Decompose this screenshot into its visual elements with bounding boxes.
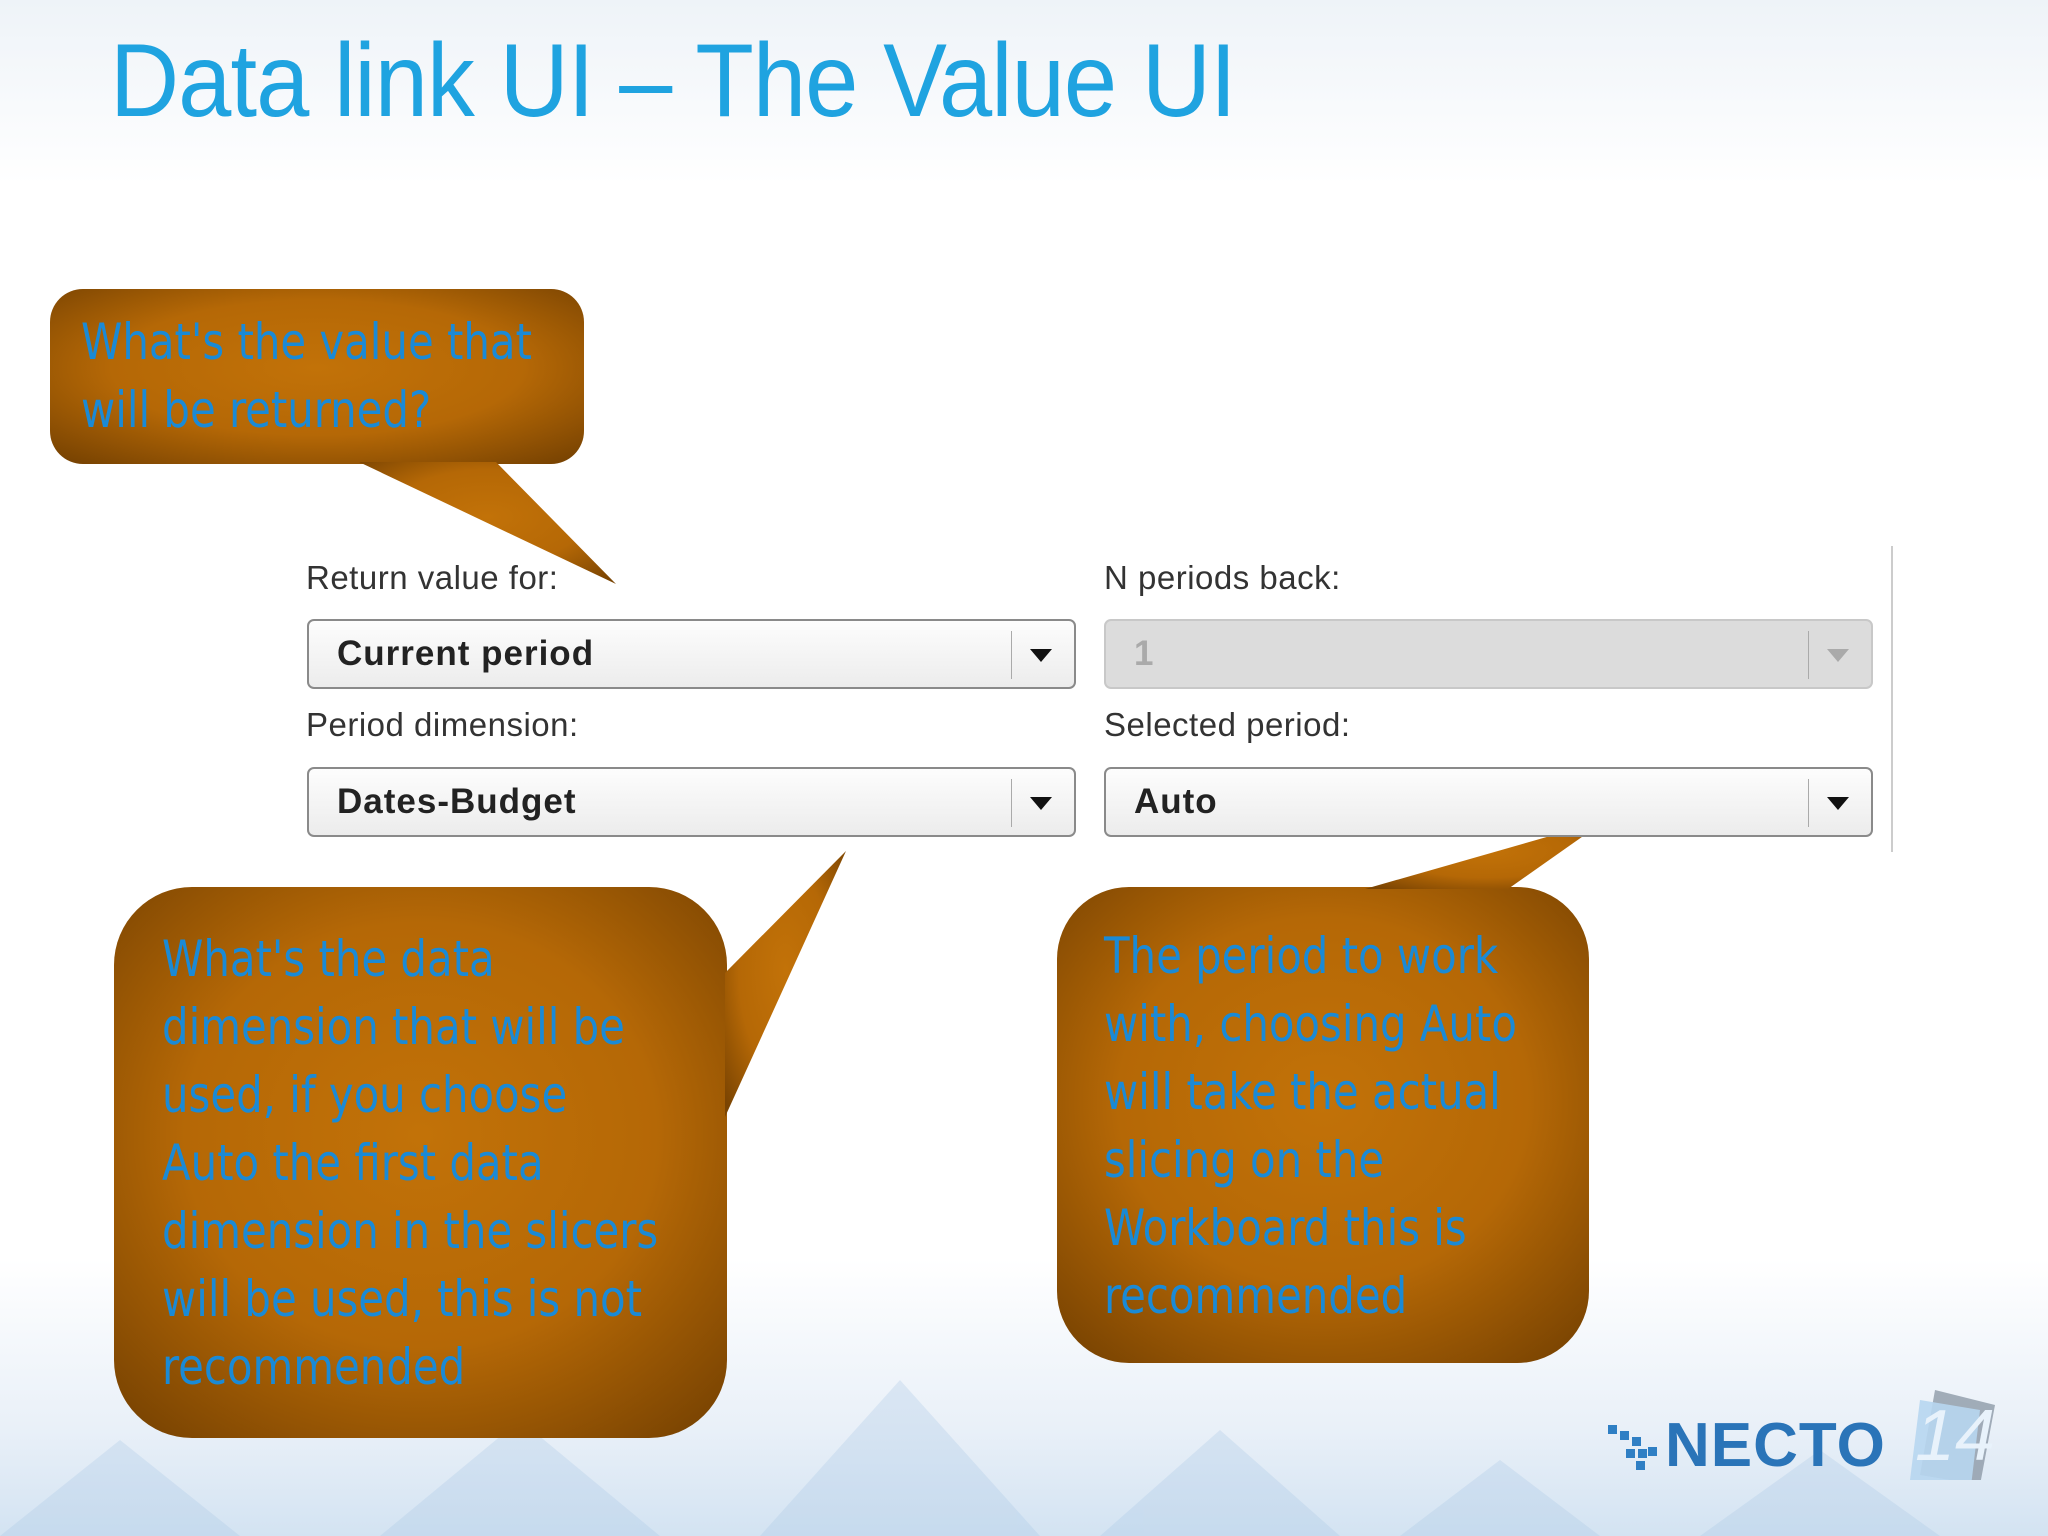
callout 3 text: will take the actual: [1104, 1063, 1501, 1121]
callout 2 text: will be used, this is not: [162, 1270, 642, 1328]
form: dates-budget dropdown: Dates-Budget: [337, 782, 577, 821]
form: selected period label: Selected period:: [1104, 706, 1350, 743]
callout 3 text: Workboard this is: [1104, 1199, 1467, 1257]
callout 1 shape: [50, 289, 616, 584]
form: current period dropdown: Current period: [337, 634, 594, 673]
title: Data link UI – The Value UI: [110, 23, 1236, 139]
logo: NECTO 14: NECTO: [1665, 1411, 1886, 1480]
callout 3 shape: [1057, 820, 1606, 1363]
callout 2 text: dimension that will be: [162, 998, 625, 1056]
form: current period dropdown: [307, 619, 1076, 689]
callout 2 text: used, if you choose: [162, 1066, 567, 1124]
callout 2 text: What's the data: [162, 930, 495, 988]
background decoration: [0, 1380, 1940, 1536]
callout 3 text: [1104, 927, 1517, 1325]
callout 1 text: What's the value that: [81, 313, 532, 371]
form: dates-budget dropdown: [307, 767, 1076, 837]
form: auto dropdown: Auto: [1134, 782, 1218, 821]
callout 2 text: [162, 930, 658, 1396]
callout 2 text: Auto the first data: [162, 1134, 544, 1192]
logo: NECTO 14: [1608, 1390, 1995, 1480]
callout 2 shape: [114, 851, 846, 1438]
callout 1 text: [81, 313, 532, 439]
form: period dimension label: Period dimension:: [306, 706, 579, 743]
callout 3 text: slicing on the: [1104, 1131, 1384, 1189]
callout 2 text: recommended: [162, 1338, 465, 1396]
form: auto dropdown: [1104, 767, 1873, 837]
form: return value label: Return value for:: [306, 559, 558, 596]
form: N periods dropdown (disabled): [1104, 619, 1873, 689]
callout 2 text: dimension in the slicers: [162, 1202, 658, 1260]
callout 3 text: recommended: [1104, 1267, 1407, 1325]
form: N periods label: N periods back:: [1104, 559, 1341, 596]
form: N periods dropdown (disabled): 1: [1134, 634, 1154, 673]
callout 3 text: The period to work: [1104, 927, 1498, 985]
callout 1 text: will be returned?: [81, 381, 431, 439]
callout 3 text: with, choosing Auto: [1104, 995, 1517, 1053]
logo: NECTO 14: 14: [1915, 1396, 1995, 1476]
